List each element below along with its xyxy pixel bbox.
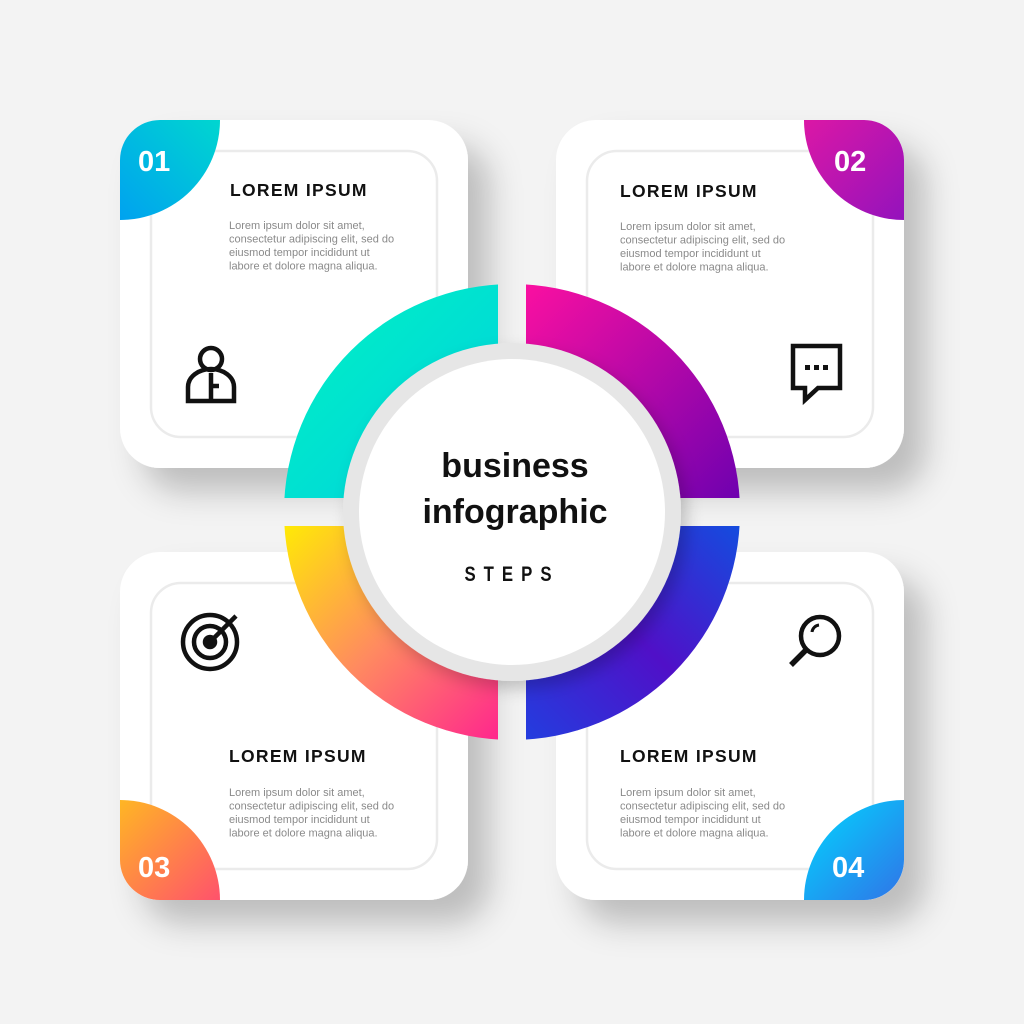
body 04: labore et dolore magna aliqua. — [620, 828, 769, 840]
badge 01: 01 — [138, 146, 170, 178]
body 04: Lorem ipsum dolor sit amet, — [620, 787, 756, 799]
body 03: eiusmod tempor incididunt ut — [229, 814, 370, 826]
subtitle: STEPS — [464, 563, 560, 587]
body 02 — [620, 221, 785, 274]
body 01: labore et dolore magna aliqua. — [229, 260, 378, 272]
badge 03: 03 — [138, 852, 170, 884]
badge 04: 04 — [832, 852, 864, 884]
body 04: eiusmod tempor incididunt ut — [620, 814, 761, 826]
body 03 — [229, 787, 394, 840]
center circle — [343, 343, 681, 681]
arc 4 — [526, 526, 740, 740]
body 02: eiusmod tempor incididunt ut — [620, 248, 761, 260]
heading 01: LOREM IPSUM — [230, 180, 368, 200]
panel: step 04 — [556, 552, 942, 940]
center circle: infographic — [422, 493, 608, 531]
icon: target — [183, 615, 237, 669]
badge 02: 02 — [834, 146, 866, 178]
arc 3 — [284, 526, 498, 740]
arc 1 — [284, 284, 498, 498]
icon: magnifier — [791, 617, 839, 665]
heading 03: LOREM IPSUM — [229, 746, 367, 766]
body 01: consectetur adipiscing elit, sed do — [229, 234, 394, 246]
icon: person — [188, 348, 234, 401]
body 01: Lorem ipsum dolor sit amet, — [229, 220, 365, 232]
title: business — [441, 447, 589, 485]
badge 04 — [804, 800, 904, 900]
panel: step 01 — [120, 120, 506, 508]
body 02: consectetur adipiscing elit, sed do — [620, 234, 785, 246]
arc 2 — [526, 284, 740, 498]
ring segments — [284, 284, 740, 740]
body 04: consectetur adipiscing elit, sed do — [620, 800, 785, 812]
body 03: consectetur adipiscing elit, sed do — [229, 800, 394, 812]
badge 03 — [120, 800, 220, 900]
heading 04: LOREM IPSUM — [620, 746, 758, 766]
panel: step 02 — [556, 120, 942, 508]
icon: chat bubble — [793, 346, 840, 400]
body 02: labore et dolore magna aliqua. — [620, 262, 769, 274]
heading 02: LOREM IPSUM — [620, 181, 758, 201]
panel: step 03 — [120, 552, 506, 940]
badge 02 — [804, 120, 904, 220]
body 03: Lorem ipsum dolor sit amet, — [229, 787, 365, 799]
body 01: eiusmod tempor incididunt ut — [229, 247, 370, 259]
body 03: labore et dolore magna aliqua. — [229, 828, 378, 840]
body 04 — [620, 787, 785, 840]
body 02: Lorem ipsum dolor sit amet, — [620, 221, 756, 233]
body 01 — [229, 220, 394, 272]
badge 01 — [120, 120, 220, 220]
